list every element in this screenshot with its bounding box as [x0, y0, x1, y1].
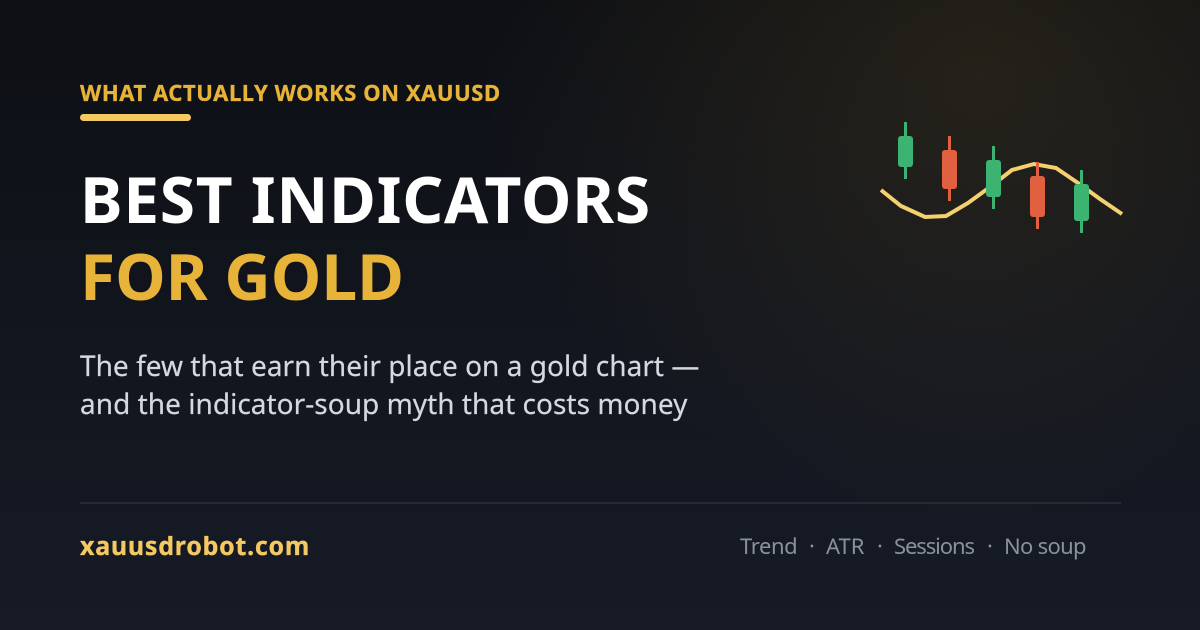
candlestick chart: [880, 122, 1124, 233]
footer tags: ·: [809, 531, 815, 561]
footer tags: No soup: [1004, 531, 1086, 561]
candle 3: [986, 146, 1001, 209]
title: [80, 155, 651, 319]
site url: xauusdrobot.com: [80, 529, 310, 563]
title: BEST INDICATORS: [80, 155, 651, 242]
subtitle: and the indicator-soup myth that costs money: [80, 385, 687, 423]
footer tags: ATR: [826, 531, 864, 561]
footer divider: [80, 502, 1121, 504]
moving average line: [881, 164, 1122, 217]
eyebrow: WHAT ACTUALLY WORKS ON XAUUSD: [80, 78, 501, 108]
accent bar: [80, 114, 191, 121]
subtitle: The few that earn their place on a gold chart —: [80, 347, 699, 385]
footer tags: Trend: [740, 531, 797, 561]
footer tags: ·: [877, 531, 883, 561]
gold radial glow: [480, 0, 1200, 520]
footer tags: ·: [987, 531, 993, 561]
candle 5: [1074, 170, 1089, 233]
footer tags: [740, 531, 1086, 561]
candle 1: [898, 122, 913, 179]
candle 4: [1030, 162, 1045, 229]
subtitle: [80, 347, 699, 423]
candle 2: [942, 136, 957, 201]
footer tags: Sessions: [894, 531, 974, 561]
title: FOR GOLD: [80, 232, 404, 319]
